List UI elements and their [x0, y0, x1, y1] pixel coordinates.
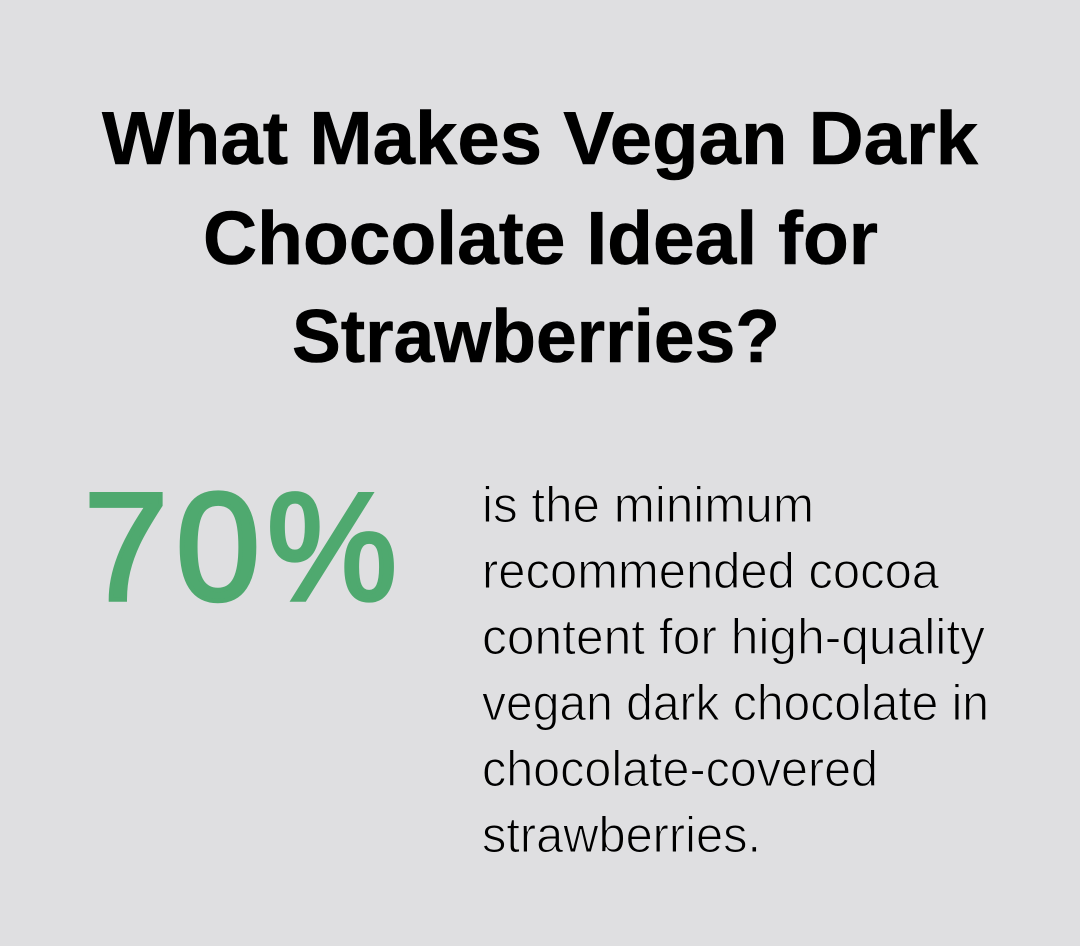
description text: recommended cocoa [482, 543, 939, 599]
statistic: 70%: % [267, 462, 397, 632]
title: Strawberries? [292, 294, 780, 378]
description text [482, 477, 989, 863]
description text: strawberries. [482, 807, 761, 863]
title: Chocolate Ideal for [203, 196, 878, 280]
title [102, 96, 978, 378]
statistic: 70% [84, 462, 397, 632]
description text: content for high-quality [482, 609, 985, 665]
description text: chocolate-covered [482, 741, 878, 797]
description text: is the minimum [482, 477, 814, 533]
title: What Makes Vegan Dark [102, 96, 978, 180]
description text: vegan dark chocolate in [482, 675, 989, 731]
statistic: 70%: 0 [176, 462, 260, 632]
statistic: 70%: 7 [84, 462, 168, 632]
